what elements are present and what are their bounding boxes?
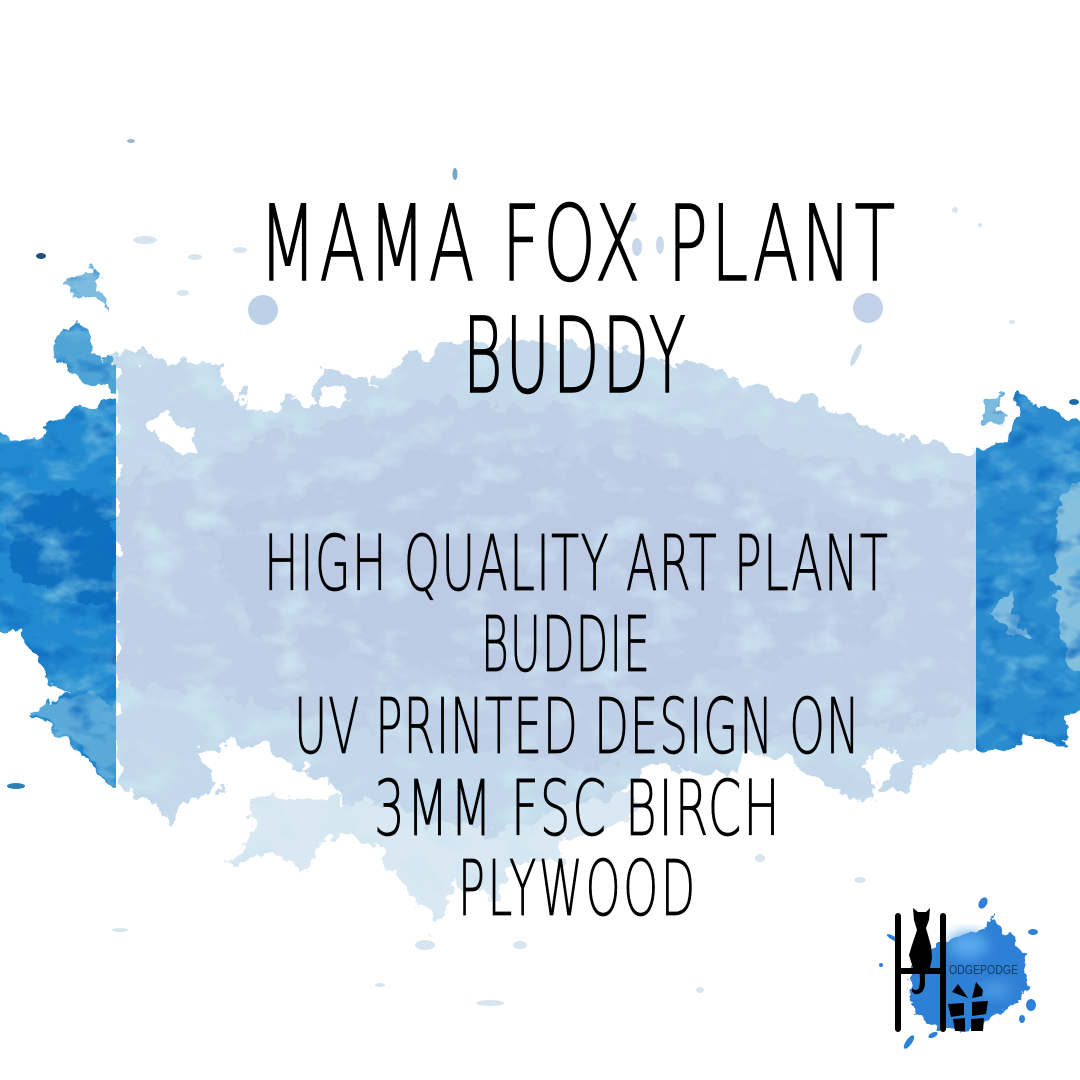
background: pale watercolor splash behind panel	[116, 340, 990, 930]
logo cat silhouette	[909, 908, 932, 994]
left saturated watercolor splash	[0, 263, 116, 788]
description text	[264, 518, 888, 933]
logo gift box	[948, 982, 988, 1031]
white gaps in the pale splash	[150, 385, 900, 790]
description text: 3MM FSC BIRCH	[374, 764, 780, 854]
title: MAMA FOX PLANT	[259, 184, 895, 305]
description text: HIGH QUALITY ART PLANT	[264, 518, 888, 608]
logo: Hodgepodge	[879, 896, 1038, 1050]
description text: BUDDIE	[481, 599, 650, 690]
logo wordmark: ODGEPODGE	[949, 962, 1018, 977]
title	[259, 184, 895, 418]
logo letter H	[898, 916, 943, 1029]
logo blue splat	[879, 896, 1038, 1050]
title: BUDDY	[463, 297, 686, 418]
scattered paint drops	[7, 139, 1079, 1006]
right saturated watercolor splash	[976, 390, 1080, 753]
description text: UV PRINTED DESIGN ON	[294, 681, 860, 771]
description text: PLYWOOD	[458, 844, 695, 933]
